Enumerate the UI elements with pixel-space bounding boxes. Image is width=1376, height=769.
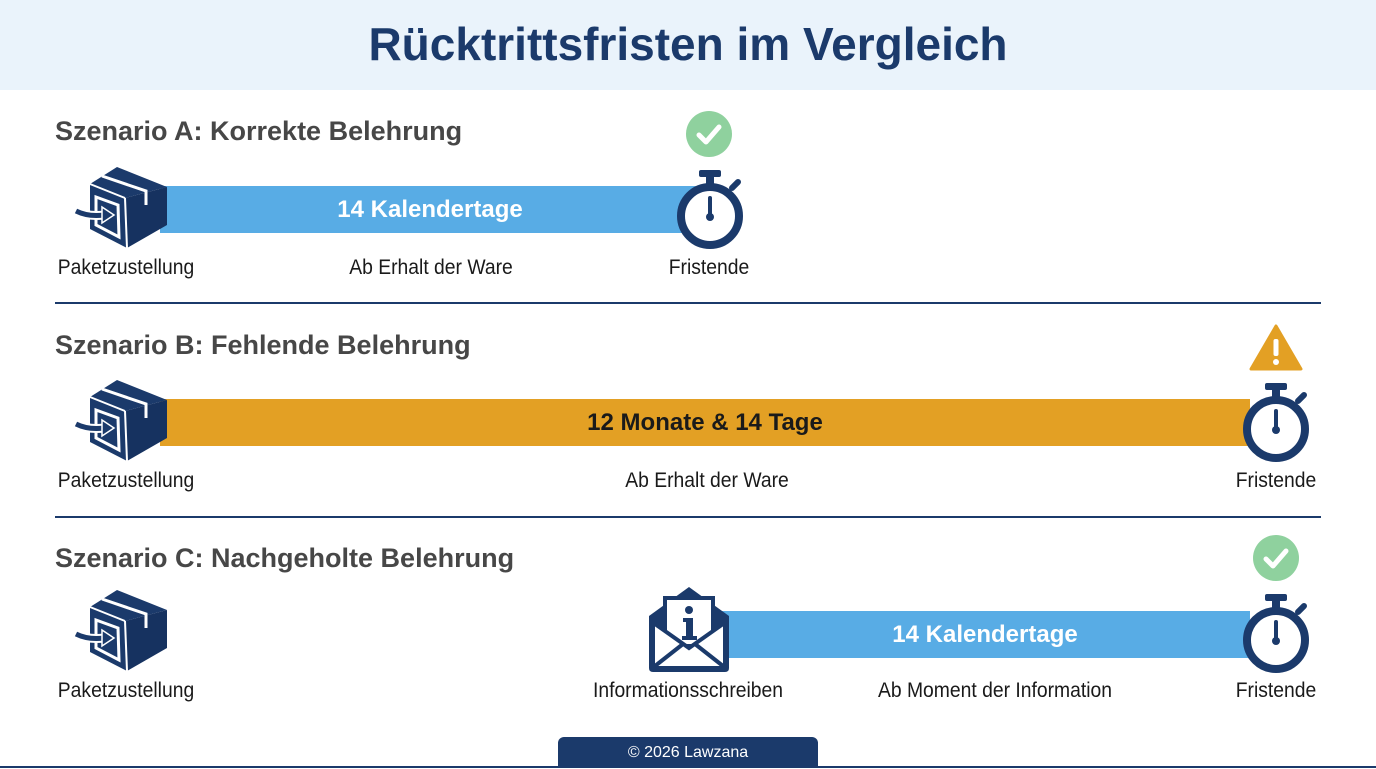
label: Informationsschreiben: Informationsschreiben xyxy=(593,679,783,702)
icon: envelope xyxy=(649,587,729,672)
label: Fristende C: Fristende xyxy=(1236,679,1316,702)
bar A: 14 Kalendertage xyxy=(337,196,523,222)
label: Paketzustellung C: Paketzustellung xyxy=(58,679,194,702)
bar A xyxy=(160,186,700,233)
footer xyxy=(558,737,818,768)
panel: scenario C xyxy=(55,535,1316,702)
panel: scenario B xyxy=(55,324,1316,492)
heading C: Szenario C: Nachgeholte Belehrung xyxy=(55,543,514,573)
label: Paketzustellung A: Paketzustellung xyxy=(58,256,194,279)
footer: © 2026 Lawzana xyxy=(628,744,748,761)
icon: check A xyxy=(686,111,732,157)
heading B: Szenario B: Fehlende Belehrung xyxy=(55,330,471,360)
panel: scenario A xyxy=(55,111,749,279)
label: Paketzustellung B: Paketzustellung xyxy=(58,469,194,492)
heading A: Szenario A: Korrekte Belehrung xyxy=(55,116,462,146)
icon: package A xyxy=(74,167,167,248)
title: Rücktrittsfristen im Vergleich xyxy=(368,18,1008,70)
icon: warning B xyxy=(1250,324,1303,370)
icon: package B xyxy=(74,380,167,460)
icon: stopwatch A xyxy=(677,170,743,249)
bar C xyxy=(720,611,1250,658)
bar B: 12 Monate & 14 Tage xyxy=(587,408,823,436)
label: Ab Erhalt A: Ab Erhalt der Ware xyxy=(349,256,513,279)
icon: stopwatch C xyxy=(1243,594,1309,673)
icon: stopwatch B xyxy=(1243,383,1309,462)
label: Fristende B: Fristende xyxy=(1236,469,1316,492)
bar C: 14 Kalendertage xyxy=(892,620,1078,648)
label: Ab Moment: Ab Moment der Information xyxy=(878,679,1112,702)
label: Fristende A: Fristende xyxy=(669,256,749,279)
title xyxy=(0,0,1376,90)
label: Ab Erhalt B: Ab Erhalt der Ware xyxy=(625,469,789,492)
bar B xyxy=(160,399,1250,446)
icon: check C xyxy=(1253,535,1299,581)
icon: package C xyxy=(74,590,167,670)
